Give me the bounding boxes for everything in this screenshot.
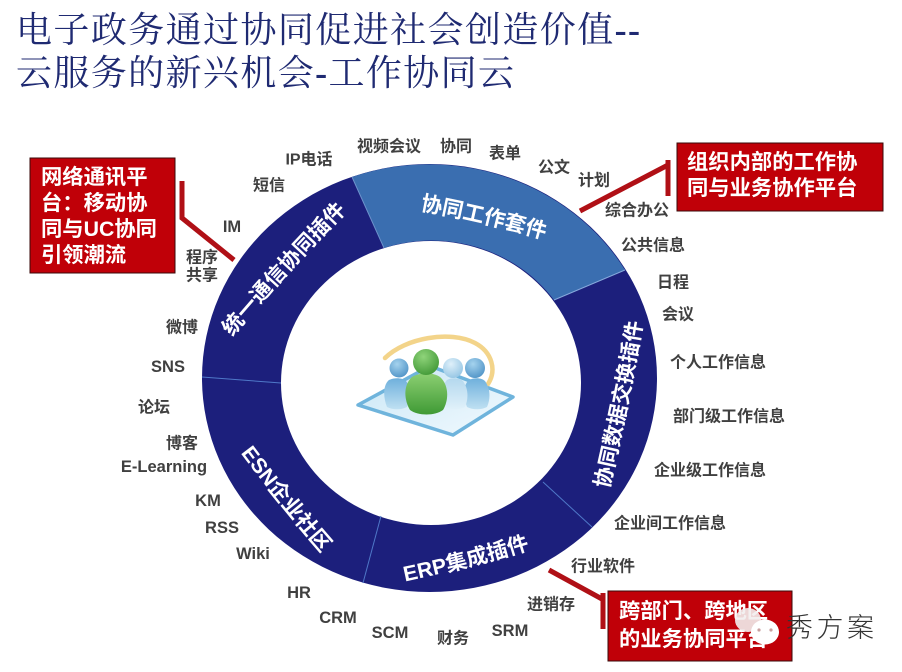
- icon: halo arc: [385, 337, 492, 384]
- callout: left: 网络通讯平: [41, 164, 148, 189]
- callout: left: [30, 158, 175, 273]
- label: 程序共享: 共享: [186, 266, 218, 284]
- label: 公文: 公文: [538, 158, 570, 176]
- ring: dark segments: [202, 164, 657, 592]
- ring diagram: [202, 164, 657, 592]
- label: 程序共享: 程序: [186, 248, 218, 266]
- watermark: [735, 606, 874, 645]
- label: 企业级工作信息: 企业级工作信息: [654, 460, 766, 480]
- label: IM: IM: [223, 218, 241, 236]
- label: 公共信息: 公共信息: [621, 236, 685, 254]
- label: SNS: SNS: [151, 358, 185, 376]
- label: 视频会议: 视频会议: [357, 136, 421, 156]
- segment label: 统一通信协同插件: 统一通信协同插件: [220, 202, 344, 337]
- icon: person pale: [443, 358, 467, 409]
- title: 云服务的新兴机会-工作协同云: [16, 53, 514, 93]
- label: 微博: 微博: [166, 318, 198, 336]
- label: KM: KM: [195, 492, 221, 510]
- label: 计划: 计划: [578, 172, 610, 190]
- callout: left: 台：移动协: [41, 190, 148, 215]
- callout: bottom: 的业务协同平台: [619, 626, 768, 651]
- callout: bottom: 跨部门、跨地区: [619, 599, 768, 623]
- icon: person right: [464, 358, 489, 409]
- segment label: ERP集成插件: ERP集成插件: [403, 534, 528, 582]
- arrow: left callout connector: [182, 181, 234, 260]
- label: 日程: 日程: [657, 274, 689, 292]
- label: 程序共享: [186, 248, 218, 284]
- label: 企业间工作信息: 企业间工作信息: [614, 514, 726, 532]
- label: RSS: RSS: [205, 519, 239, 537]
- label: Wiki: Wiki: [236, 545, 270, 563]
- icon: platform: [358, 366, 513, 435]
- label: 论坛: 论坛: [138, 398, 170, 416]
- label: 短信: 短信: [253, 176, 285, 194]
- label: HR: HR: [287, 584, 311, 602]
- label: 进销存: 进销存: [527, 596, 575, 614]
- icon: person green: [405, 349, 447, 414]
- callout: right: [677, 143, 883, 211]
- callout: left: 同与UC协同: [41, 217, 157, 241]
- watermark text: 秀方案: [786, 606, 874, 645]
- label: 综合办公: 综合办公: [605, 200, 669, 220]
- label: IP电话: IP电话: [285, 150, 333, 168]
- icon: person left: [384, 358, 410, 409]
- label: 博客: 博客: [166, 434, 198, 452]
- label: CRM: CRM: [319, 609, 357, 627]
- label: 表单: 表单: [489, 144, 521, 162]
- label: 会议: 会议: [662, 304, 694, 324]
- segment label: 协同数据交换插件: 协同数据交换插件: [592, 322, 644, 487]
- arrow: right callout connector: [580, 160, 668, 211]
- label: 财务: 财务: [437, 628, 469, 648]
- icon: central people group: [358, 337, 513, 435]
- label: 部门级工作信息: 部门级工作信息: [673, 406, 785, 426]
- callout: right: 同与业务协作平台: [687, 175, 857, 200]
- title: [16, 10, 640, 93]
- label: E-Learning: E-Learning: [121, 458, 207, 476]
- label: 个人工作信息: 个人工作信息: [670, 352, 766, 372]
- callout: right: 组织内部的工作协: [687, 150, 858, 174]
- callout: bottom: [608, 591, 792, 661]
- callout: left: 引领潮流: [41, 243, 126, 267]
- segment dividers: [202, 177, 625, 583]
- label: 行业软件: 行业软件: [571, 558, 635, 576]
- label: SCM: SCM: [372, 624, 408, 642]
- label: 协同: 协同: [440, 138, 472, 156]
- icon: chat bubbles: [735, 608, 779, 644]
- segment label: 协同工作套件: 协同工作套件: [422, 192, 546, 240]
- title: 电子政务通过协同促进社会创造价值--: [16, 10, 640, 50]
- item labels: [121, 136, 785, 648]
- segment label: ESN企业社区: ESN企业社区: [241, 445, 334, 554]
- segment: 协同工作套件: [352, 164, 625, 300]
- label: SRM: SRM: [492, 622, 528, 640]
- arrow: bottom callout connector: [549, 570, 603, 629]
